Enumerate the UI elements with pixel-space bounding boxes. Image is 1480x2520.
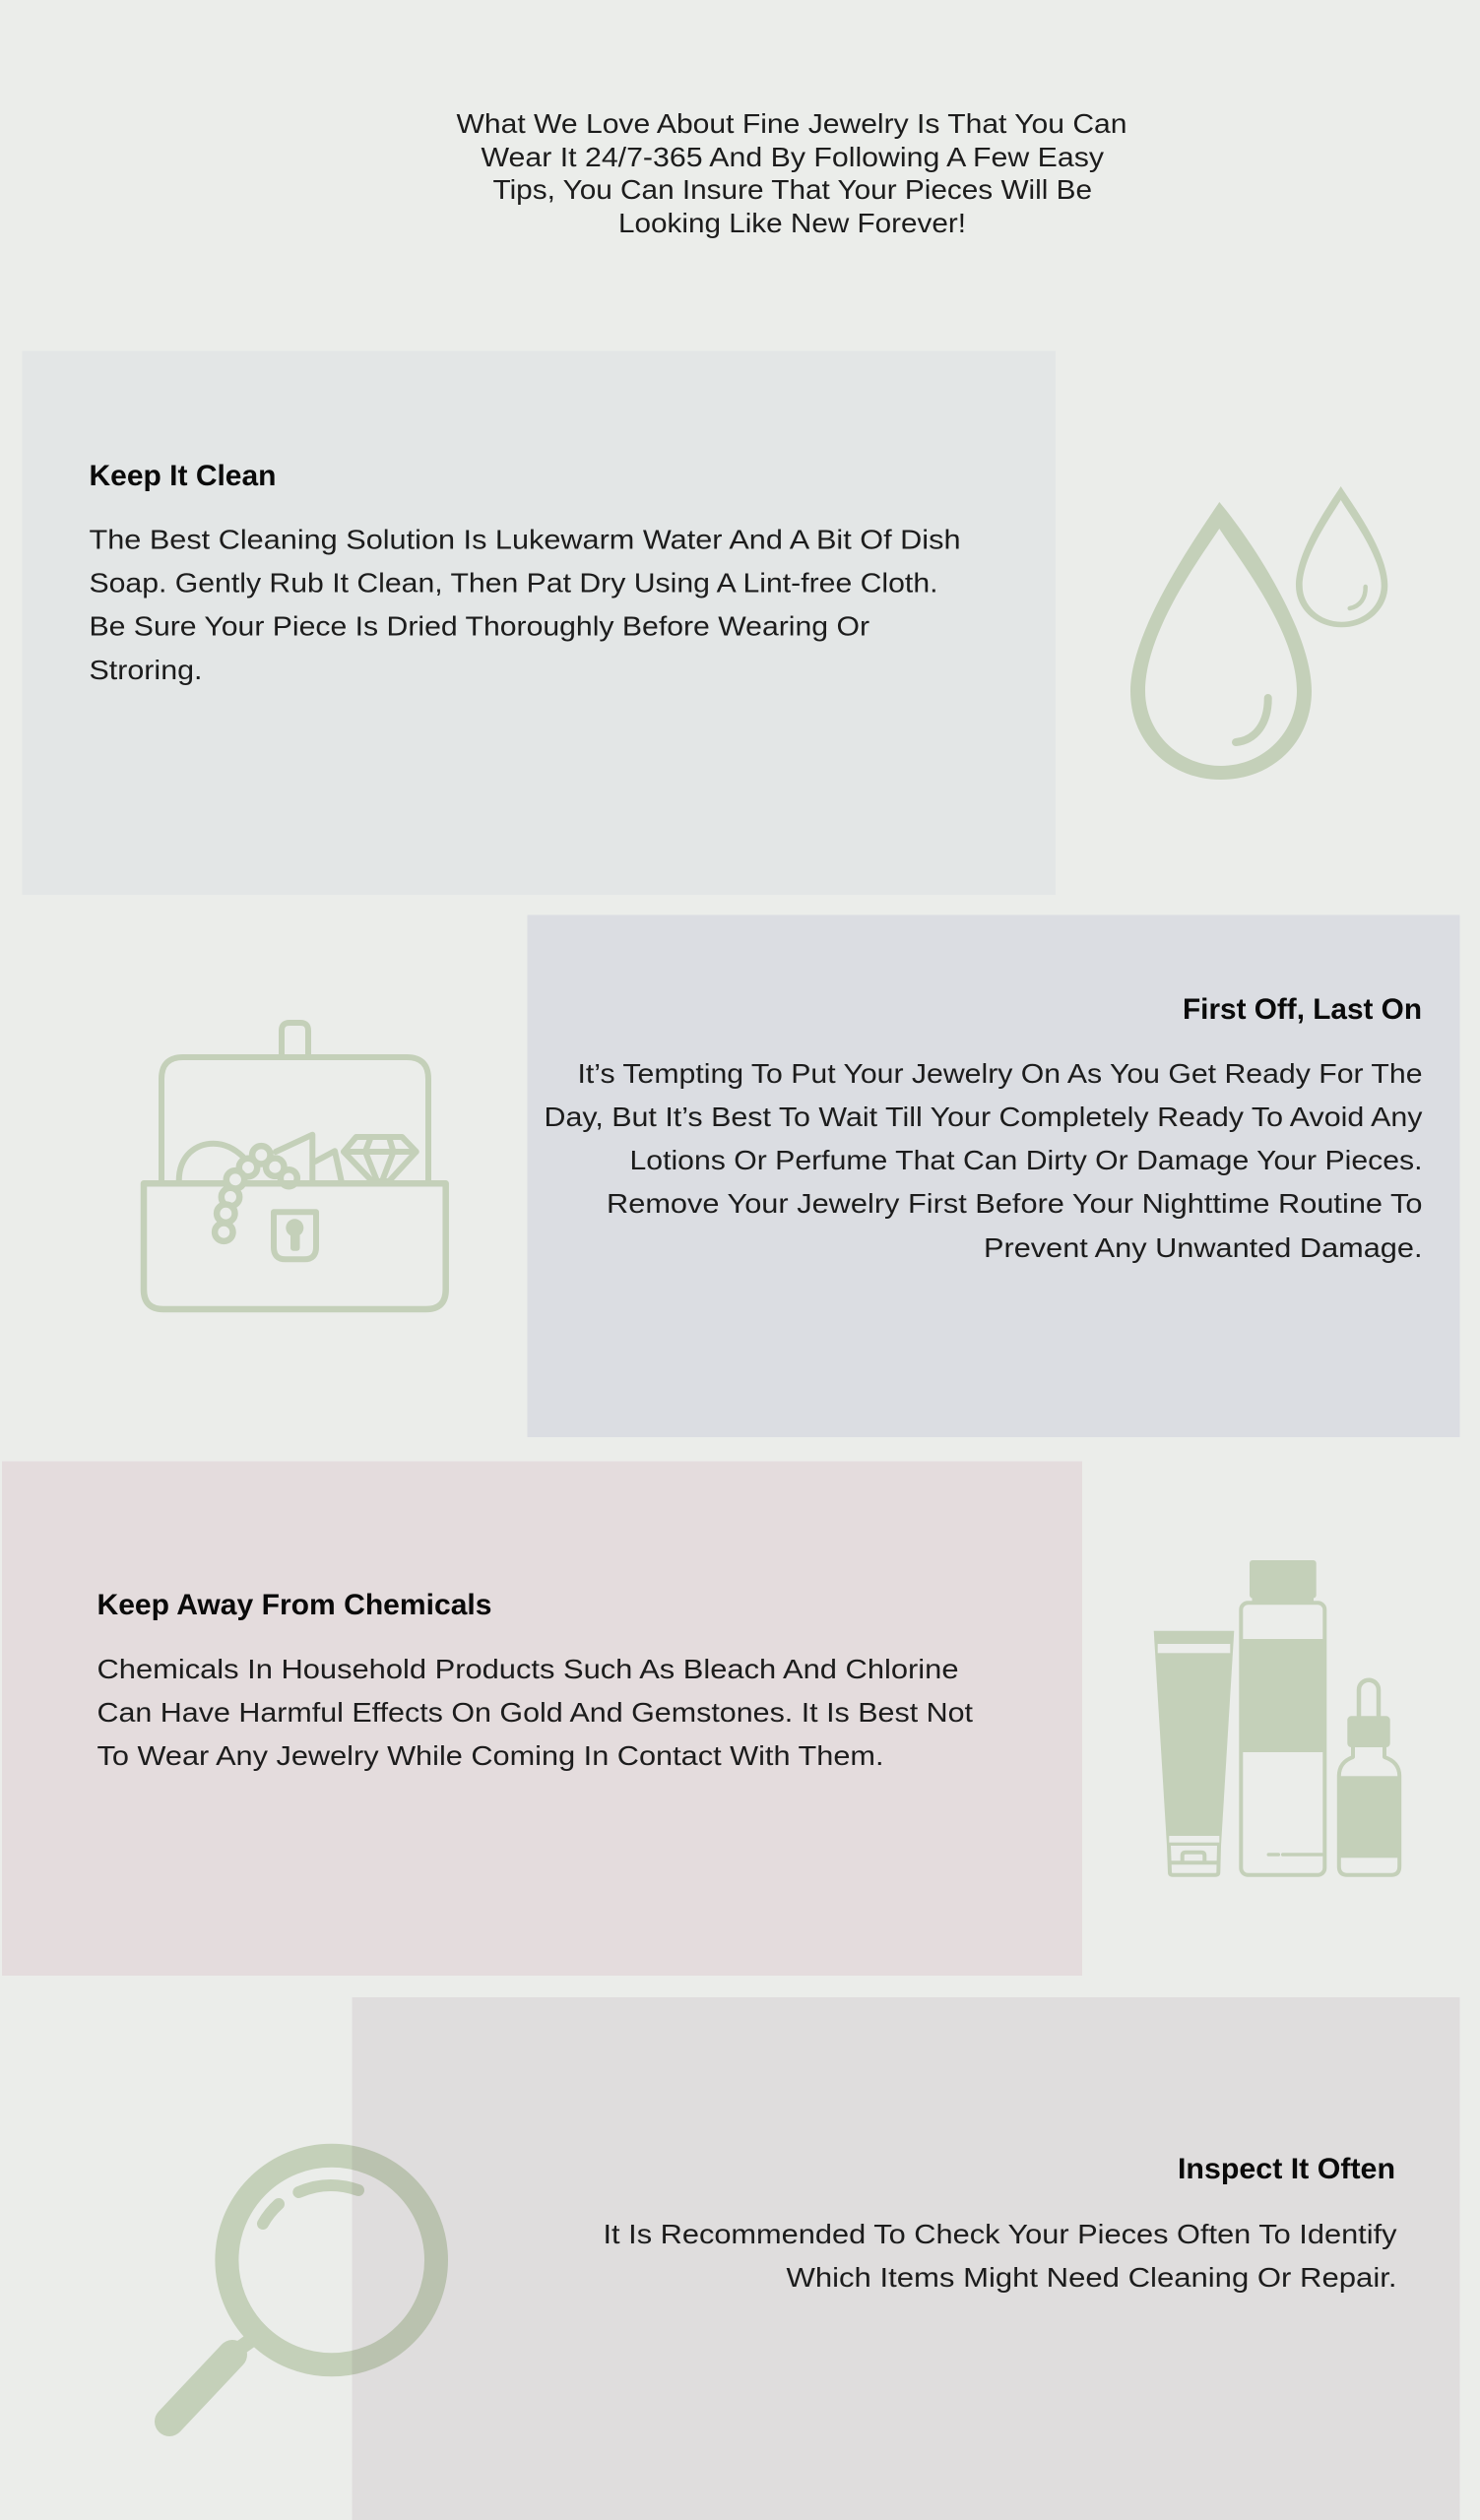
icon: cosmetic bottles <box>1154 1560 1401 1875</box>
heading: inspect it often: Inspect It Often <box>1178 2153 1395 2185</box>
body text: first off, last on: Day, But It’s Best To Wait Till Your Completely Ready To Avoid Any <box>544 1102 1422 1132</box>
dropper bottle <box>1337 1680 1401 1875</box>
panel: inspect it often <box>353 1997 1459 2520</box>
body text: inspect it often: Which Items Might Need Cleaning Or Repair. <box>786 2262 1396 2293</box>
intro text: Looking Like New Forever! <box>618 208 966 238</box>
tall bottle <box>1240 1560 1326 1875</box>
heading: keep away from chemicals: Keep Away From Chemicals <box>97 1589 492 1621</box>
body text: keep away from chemicals: Can Have Harmful Effects On Gold And Gemstones. It Is Best Not <box>97 1697 973 1728</box>
body text: first off, last on: Prevent Any Unwanted Damage. <box>984 1232 1422 1263</box>
icon: jewelry box <box>144 1023 446 1309</box>
body text: inspect it often <box>603 2219 1396 2293</box>
body text: first off, last on <box>544 1058 1422 1263</box>
intro text: Tips, You Can Insure That Your Pieces Will Be <box>492 174 1092 205</box>
intro text: What We Love About Fine Jewelry Is That You Can <box>457 108 1126 139</box>
panel: keep it clean <box>22 350 1056 895</box>
body text: first off, last on: Remove Your Jewelry First Before Your Nighttime Routine To <box>607 1188 1422 1219</box>
body text: inspect it often: It Is Recommended To Check Your Pieces Often To Identify <box>603 2219 1396 2249</box>
tube <box>1154 1631 1234 1875</box>
icon: water drops <box>1130 486 1387 780</box>
body text: keep away from chemicals <box>97 1654 973 1771</box>
body text: keep it clean: Be Sure Your Piece Is Dried Thoroughly Before Wearing Or <box>89 610 869 642</box>
body text: keep away from chemicals: Chemicals In Household Products Such As Bleach And Chlorine <box>97 1654 958 1684</box>
body text: first off, last on: It’s Tempting To Put Your Jewelry On As You Get Ready For The <box>577 1058 1422 1089</box>
intro text: Wear It 24/7-365 And By Following A Few Easy <box>481 142 1104 172</box>
heading: first off, last on: First Off, Last On <box>1183 993 1422 1026</box>
panel: keep away from chemicals <box>2 1461 1082 1976</box>
body text: keep away from chemicals: To Wear Any Jewelry While Coming In Contact With Them. <box>97 1740 884 1771</box>
body text: keep it clean: The Best Cleaning Solution Is Lukewarm Water And A Bit Of Dish <box>89 524 960 555</box>
body text: keep it clean: Stroring. <box>89 655 203 685</box>
panel: first off, last on <box>528 915 1459 1437</box>
body text: first off, last on: Lotions Or Perfume That Can Dirty Or Damage Your Pieces. <box>630 1145 1422 1175</box>
body text: keep it clean <box>89 524 960 685</box>
heading: keep it clean: Keep It Clean <box>89 460 276 492</box>
body text: keep it clean: Soap. Gently Rub It Clean, Then Pat Dry Using A Lint-free Cloth. <box>89 567 937 598</box>
intro text <box>457 108 1126 238</box>
icon: magnifying glass <box>169 2156 436 2422</box>
